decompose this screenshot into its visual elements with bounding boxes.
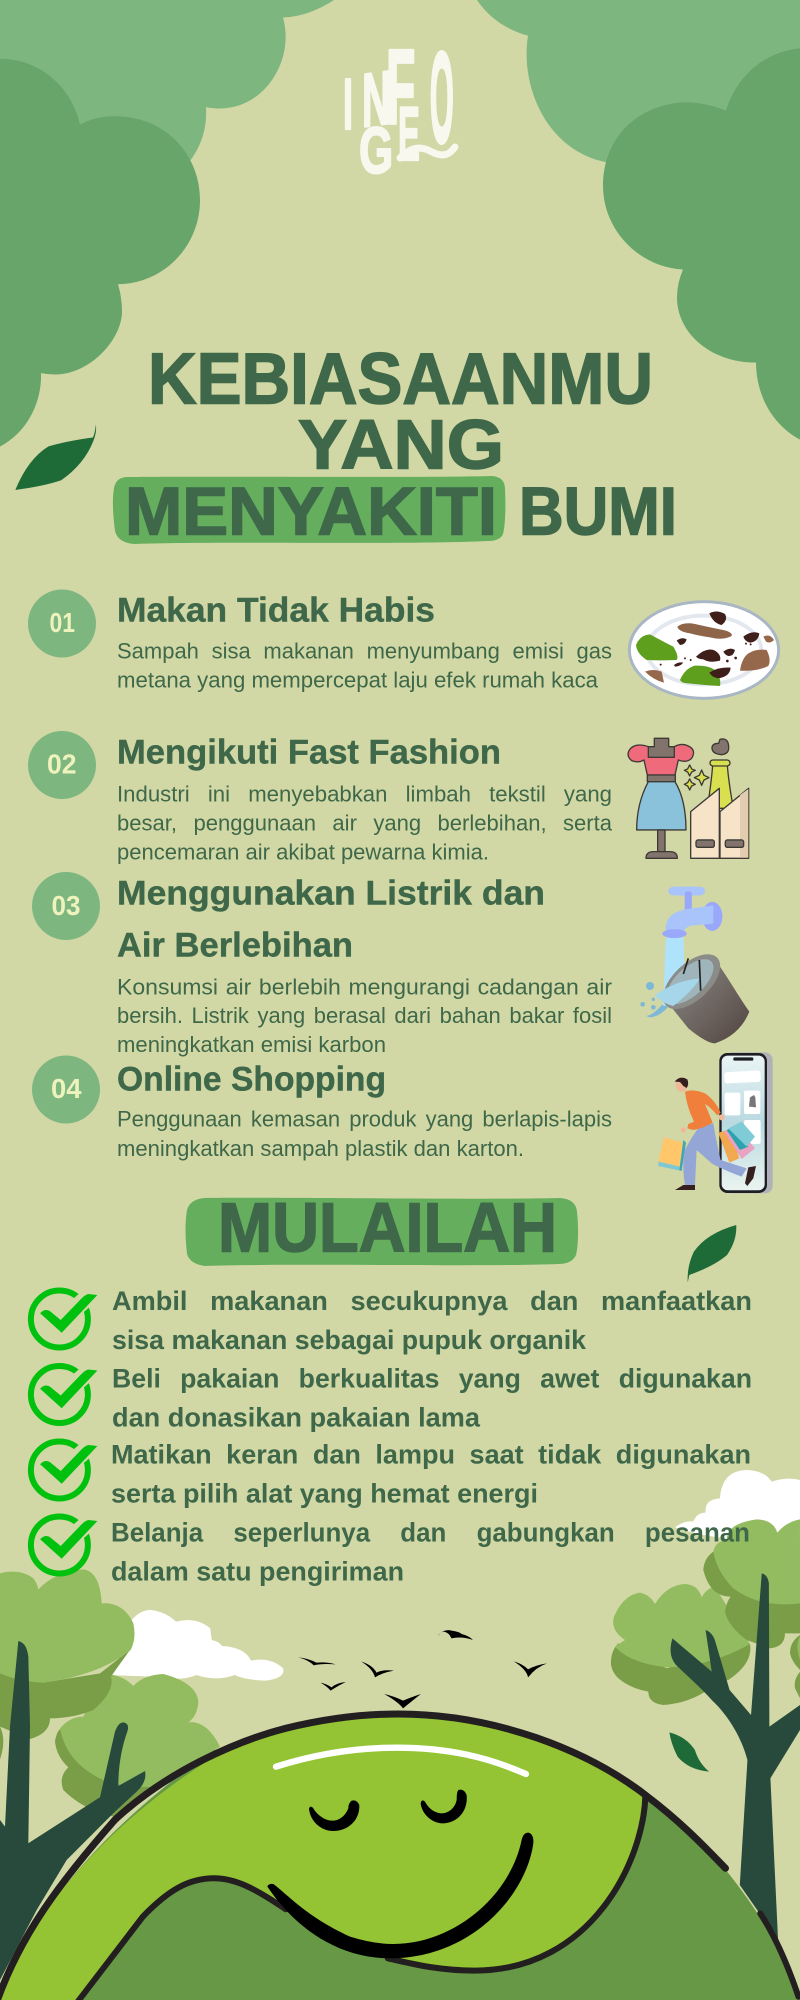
title: KEBIASAANMU [148,340,653,420]
icon: running tap and tipped bucket [640,887,749,1043]
left eye [309,1800,359,1831]
title: BUMI [519,474,677,550]
item 01 text [117,592,612,692]
item 02 number badge: 02 [47,748,76,780]
checklist text: Belanja seperlunya dan gabungkan pesanan [111,1518,750,1548]
item 03 text: Menggunakan Listrik dan [117,874,545,912]
item 03 number badge [32,872,100,940]
section heading: mulailah: MULAILAH [218,1188,557,1266]
top canopy: left dark foliage [0,59,200,447]
checklist text: Beli pakaian berkualitas yang awet digunakan [112,1364,752,1394]
title [113,340,677,550]
checklist text: serta pilih alat yang hemat energi [111,1478,538,1508]
birds [298,1630,547,1708]
leaf: right of mulailah [688,1225,736,1282]
item 01 text: metana yang mempercepat laju efek rumah kaca [117,668,599,692]
item 03 text [117,874,612,1057]
icon: dress and factory [628,738,749,858]
checklist icons [31,1290,97,1574]
icon: plate of leftovers [629,602,779,698]
item 01 number badge [28,590,96,658]
checklist text: dalam satu pengiriman [111,1556,404,1586]
item 04 text: Penggunaan kemasan produk yang berlapis-lapis [117,1106,612,1132]
bottom scenery: right trees [611,1519,800,1705]
checklist text: Ambil makanan secukupnya dan manfaatkan [112,1286,752,1316]
checklist text: dan donasikan pakaian lama [112,1402,481,1432]
bottom scenery: clouds [105,1470,800,1681]
item 02 text: pencemaran air akibat pewarna kimia. [117,840,489,864]
item 03 text: Konsumsi air berlebih mengurangi cadangan air [117,974,612,1000]
logo: Info Geo: O [430,26,454,170]
checklist text: sisa makanan sebagai pupuk organik [112,1325,587,1355]
item 01 text: Makan Tidak Habis [117,592,435,630]
logo: Info Geo: I [343,64,353,145]
title: MENYAKITI [125,474,497,550]
item 02 number badge [28,731,96,799]
smiling earth hill [0,1714,800,2000]
title: YANG [298,406,504,484]
logo: Info Geo [343,26,455,187]
logo: Info Geo: F [386,29,415,146]
item 03 number badge: 03 [52,890,80,921]
logo: Info Geo: E [398,92,420,177]
item 01 text: Sampah sisa makanan menyumbang emisi gas [117,638,612,664]
item 03 text: bersih. Listrik yang berasal dari bahan bakar fosil [117,1003,612,1028]
top canopy: left light foliage [0,0,334,210]
smile [267,1833,533,1958]
leaf: top left [15,424,96,490]
item 03 text: Air Berlebihan [117,926,353,964]
bottom scenery: left trees [0,1569,220,1980]
logo: Info Geo: O [430,26,454,170]
item 04 number badge: 04 [51,1073,82,1104]
hill outlines [0,1714,798,2000]
checklist text [111,1286,752,1586]
right eye [421,1790,467,1823]
item 04 number badge [32,1056,100,1124]
item 04 text: Online Shopping [117,1060,386,1098]
title highlight: menyakiti [113,476,505,544]
item 04 text: meningkatkan sampah plastik dan karton. [117,1136,524,1161]
right tree trunk [671,1573,800,1940]
item 03 text: meningkatkan emisi karbon [117,1032,386,1057]
face highlight [276,1748,526,1774]
item 02 text: Mengikuti Fast Fashion [117,734,501,772]
item 01 number badge: 01 [50,607,75,638]
item 02 text [117,734,613,864]
hill: dark green ground [0,1750,800,2000]
item 02 text: besar, penggunaan air yang berlebihan, serta [117,810,613,836]
falling leaf: right [669,1732,709,1772]
icon: shopper with phone [658,1052,773,1193]
checklist text: Matikan keran dan lampu saat tidak digunakan [111,1440,751,1470]
smiling face [267,1748,533,1958]
logo: Info Geo: N [362,54,391,143]
hill: light green face [0,1714,645,2000]
item 02 text: Industri ini menyebabkan limbah tekstil yang [117,782,612,806]
top canopy: right light foliage [477,0,800,168]
logo: Info Geo: G [359,113,393,187]
top canopy: right dark foliage [603,48,800,440]
item 04 text [117,1060,612,1161]
